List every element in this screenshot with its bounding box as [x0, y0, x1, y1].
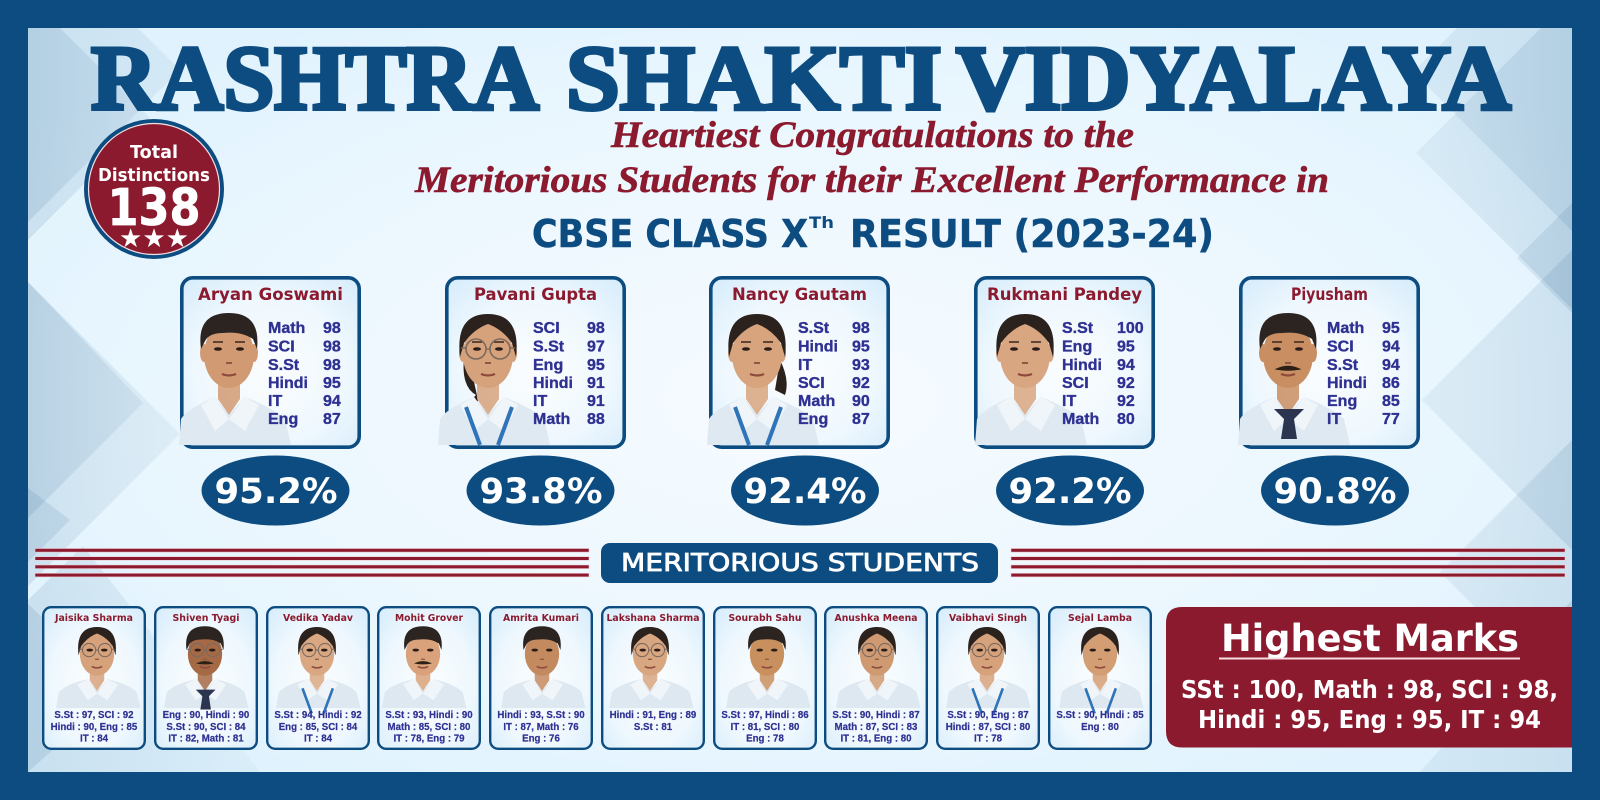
panel: Aryan Goswami: SCI	[268, 338, 295, 356]
panel: Piyusham: Hindi	[1327, 375, 1367, 392]
card: Jaisika Sharma: Hindi : 90, Eng : 85	[51, 722, 138, 733]
card: Vedika Yadav	[267, 607, 369, 749]
panel: Pavani Gupta: Pavani Gupta	[474, 285, 597, 305]
card: Vedika Yadav: Eng : 85, SCI : 84	[279, 722, 358, 733]
panel: Pavani Gupta: 98	[587, 320, 605, 337]
panel: Rukmani Pandey: S.St	[1062, 320, 1094, 337]
card: Vedika Yadav: Vedika Yadav	[283, 613, 353, 624]
panel: Nancy Gautam: 93	[852, 357, 870, 374]
panel: Rukmani Pandey: 80	[1117, 411, 1135, 428]
card: Sejal Lamba: S.St : 90, Hindi : 85	[1056, 710, 1144, 721]
card: Shiven Tyagi	[155, 607, 257, 749]
panel: Nancy Gautam: Nancy Gautam	[732, 285, 867, 305]
heading: congratulations	[414, 115, 1329, 201]
title: VIDYALAYA	[956, 27, 1511, 129]
panel: Nancy Gautam	[707, 278, 888, 447]
panel: Aryan Goswami	[179, 278, 359, 447]
card: Lakshana Sharma: S.St : 81	[634, 722, 673, 733]
card: Shiven Tyagi: Shiven Tyagi	[172, 613, 240, 624]
card: Sourabh Sahu: S.St : 97, Hindi : 86	[721, 710, 809, 721]
card: Shiven Tyagi: IT : 82, Math : 81	[168, 734, 244, 744]
banner: meritorious students	[601, 543, 998, 583]
percentage: Piyusham: 90.8%	[1274, 472, 1396, 512]
panel: highest marks: Highest Marks	[1221, 617, 1519, 660]
panel: Piyusham: Math	[1327, 320, 1364, 337]
panel: Pavani Gupta: 97	[587, 338, 605, 356]
panel: Aryan Goswami: Aryan Goswami	[198, 285, 343, 305]
panel: Pavani Gupta: Eng	[533, 357, 563, 374]
card: Lakshana Sharma	[602, 607, 704, 749]
percentage: Pavani Gupta: 93.8%	[480, 472, 602, 512]
panel: Rukmani Pandey: 100	[1117, 320, 1144, 337]
heading: class result: RESULT (2023-24)	[850, 212, 1214, 256]
card: Anushka Meena: IT : 81, Eng : 80	[840, 734, 912, 744]
panel: Piyusham: 86	[1382, 375, 1400, 392]
card: Mohit Grover	[378, 607, 480, 749]
panel: Aryan Goswami: 95	[323, 375, 341, 392]
panel: Aryan Goswami: 98	[323, 338, 341, 356]
percentage: Piyusham	[1261, 456, 1409, 526]
card: Anushka Meena: Math : 87, SCI : 83	[835, 722, 918, 733]
panel: Nancy Gautam: Math	[798, 393, 835, 410]
panel: Rukmani Pandey: 92	[1117, 393, 1135, 410]
panel: Nancy Gautam: 98	[852, 320, 870, 337]
panel: Piyusham	[1238, 278, 1418, 447]
card: Sourabh Sahu: Sourabh Sahu	[728, 613, 802, 624]
card: Vedika Yadav: S.St : 94, Hindi : 92	[274, 710, 362, 721]
card: Lakshana Sharma: Lakshana Sharma	[606, 613, 700, 624]
card: Vaibhavi Singh: S.St : 90, Eng : 87	[947, 710, 1029, 721]
percentage: Rukmani Pandey	[996, 456, 1144, 526]
card: Vaibhavi Singh: Vaibhavi Singh	[949, 613, 1027, 624]
panel: Aryan Goswami: 94	[323, 393, 341, 410]
panel: Nancy Gautam: Eng	[798, 411, 828, 428]
heading: class result	[532, 212, 1214, 256]
card: Amrita Kumari: IT : 87, Math : 76	[503, 722, 579, 733]
badge: total distinctions: ★★★	[119, 224, 189, 254]
card: Lakshana Sharma: Hindi : 91, Eng : 89	[610, 710, 697, 721]
panel: Pavani Gupta: Math	[533, 411, 570, 428]
card: Jaisika Sharma: Jaisika Sharma	[54, 613, 133, 624]
panel: Rukmani Pandey: Rukmani Pandey	[987, 285, 1142, 305]
card: Shiven Tyagi: Eng : 90, Hindi : 90	[163, 710, 249, 721]
panel: Piyusham: 77	[1382, 411, 1400, 428]
card: Anushka Meena	[825, 607, 927, 749]
panel: Rukmani Pandey: Math	[1062, 411, 1099, 428]
panel: Rukmani Pandey: 94	[1117, 357, 1135, 374]
panel: Pavani Gupta: IT	[533, 393, 547, 410]
panel: Piyusham: 94	[1382, 338, 1400, 356]
card: Sejal Lamba	[1049, 607, 1151, 749]
card: Vaibhavi Singh: IT : 78	[974, 734, 1003, 744]
panel: Nancy Gautam: 92	[852, 375, 870, 392]
percentage: Aryan Goswami	[202, 456, 350, 526]
panel: highest marks: SSt : 100, Math : 98, SCI : 98,	[1181, 675, 1558, 704]
heading: congratulations: Meritorious Students for their Excellent Performance in	[414, 160, 1329, 201]
card: Sourabh Sahu: IT : 81, SCI : 80	[731, 722, 799, 733]
panel: Piyusham: 95	[1382, 320, 1400, 337]
panel: Pavani Gupta: 91	[587, 393, 605, 410]
badge: total distinctions: Total	[130, 142, 178, 163]
panel: Piyusham: SCI	[1327, 338, 1354, 356]
percentage: Pavani Gupta	[466, 456, 614, 526]
card: Mohit Grover: Math : 85, SCI : 80	[388, 722, 470, 733]
panel: Rukmani Pandey: Hindi	[1062, 357, 1102, 374]
panel: Rukmani Pandey: IT	[1062, 393, 1076, 410]
panel: Piyusham: S.St	[1327, 357, 1359, 374]
title: SHAKTI	[566, 27, 942, 129]
percentage: Nancy Gautam: 92.4%	[744, 472, 866, 512]
panel: Pavani Gupta	[438, 278, 624, 447]
panel: Aryan Goswami: Math	[268, 320, 305, 337]
card: Jaisika Sharma: S.St : 97, SCI : 92	[54, 710, 134, 721]
panel: Rukmani Pandey: 95	[1117, 338, 1135, 356]
panel: Rukmani Pandey	[975, 278, 1153, 447]
card: Jaisika Sharma	[43, 607, 145, 749]
panel: Aryan Goswami: 98	[323, 357, 341, 374]
title: RASHTRA	[91, 27, 539, 129]
panel: Nancy Gautam: 95	[852, 338, 870, 356]
card: Amrita Kumari: Hindi : 93, S.St : 90	[497, 710, 585, 721]
heading: class result: CBSE CLASS X	[532, 212, 808, 256]
card: Mohit Grover: S.St : 93, Hindi : 90	[385, 710, 473, 721]
panel: Rukmani Pandey: SCI	[1062, 375, 1089, 392]
card: Mohit Grover: IT : 78, Eng : 79	[393, 734, 465, 744]
card: Sourabh Sahu: Eng : 78	[746, 734, 784, 744]
panel: Nancy Gautam: S.St	[798, 320, 830, 337]
panel: Aryan Goswami: Eng	[268, 411, 298, 428]
percentage: Rukmani Pandey: 92.2%	[1008, 472, 1132, 512]
card: Vedika Yadav: IT : 84	[304, 734, 333, 744]
panel: Rukmani Pandey: 92	[1117, 375, 1135, 392]
percentage: Aryan Goswami: 95.2%	[214, 472, 338, 512]
panel: Nancy Gautam: Hindi	[798, 338, 838, 356]
heading: congratulations: Heartiest Congratulations to the	[610, 115, 1134, 156]
panel: Pavani Gupta: 88	[587, 411, 605, 428]
panel: Nancy Gautam: 87	[852, 411, 870, 428]
panel: Piyusham: IT	[1327, 411, 1341, 428]
card: Jaisika Sharma: IT : 84	[80, 734, 109, 744]
panel: Nancy Gautam: 90	[852, 393, 870, 410]
panel: Aryan Goswami: S.St	[268, 357, 300, 374]
card: Vaibhavi Singh	[937, 607, 1039, 749]
panel: Pavani Gupta: 95	[587, 357, 605, 374]
card: Amrita Kumari: Eng : 76	[522, 734, 560, 744]
panel: Pavani Gupta: SCI	[533, 320, 560, 337]
panel: Pavani Gupta: 91	[587, 375, 605, 392]
card: Vaibhavi Singh: Hindi : 87, SCI : 80	[946, 722, 1030, 733]
panel: Piyusham: 85	[1382, 393, 1400, 410]
card: Sejal Lamba: Sejal Lamba	[1068, 613, 1132, 624]
title	[91, 27, 1511, 129]
panel: Piyusham: Eng	[1327, 393, 1357, 410]
banner: meritorious students: MERITORIOUS STUDENTS	[621, 548, 979, 577]
panel: Aryan Goswami: Hindi	[268, 375, 308, 392]
card: Mohit Grover: Mohit Grover	[395, 613, 463, 624]
badge: total distinctions: 138	[108, 179, 200, 238]
panel: Aryan Goswami: 87	[323, 411, 341, 428]
panel: highest marks: Hindi : 95, Eng : 95, IT : 94	[1198, 705, 1541, 734]
panel: Aryan Goswami: IT	[268, 393, 282, 410]
panel: Pavani Gupta: Hindi	[533, 375, 573, 392]
badge: total distinctions	[84, 119, 224, 259]
panel: Rukmani Pandey: Eng	[1062, 338, 1092, 356]
percentage: Nancy Gautam	[731, 456, 879, 526]
heading: class result: Th	[809, 213, 834, 232]
panel: Pavani Gupta: S.St	[533, 338, 565, 356]
card: Anushka Meena: Anushka Meena	[834, 613, 918, 624]
card: Sourabh Sahu	[714, 607, 816, 749]
panel: highest marks	[1166, 607, 1572, 748]
panel: Piyusham: 94	[1382, 357, 1400, 374]
card: Anushka Meena: S.St : 90, Hindi : 87	[832, 710, 920, 721]
card: Amrita Kumari	[490, 607, 592, 749]
panel: Aryan Goswami: 98	[323, 320, 341, 337]
card: Amrita Kumari: Amrita Kumari	[503, 613, 579, 624]
panel: Piyusham: Piyusham	[1291, 285, 1368, 305]
card: Sejal Lamba: Eng : 80	[1081, 722, 1119, 733]
panel: Nancy Gautam: IT	[798, 357, 812, 374]
badge: total distinctions: Distinctions	[98, 165, 210, 186]
panel: Nancy Gautam: SCI	[798, 375, 825, 392]
card: Shiven Tyagi: S.St : 90, SCI : 84	[166, 722, 246, 733]
